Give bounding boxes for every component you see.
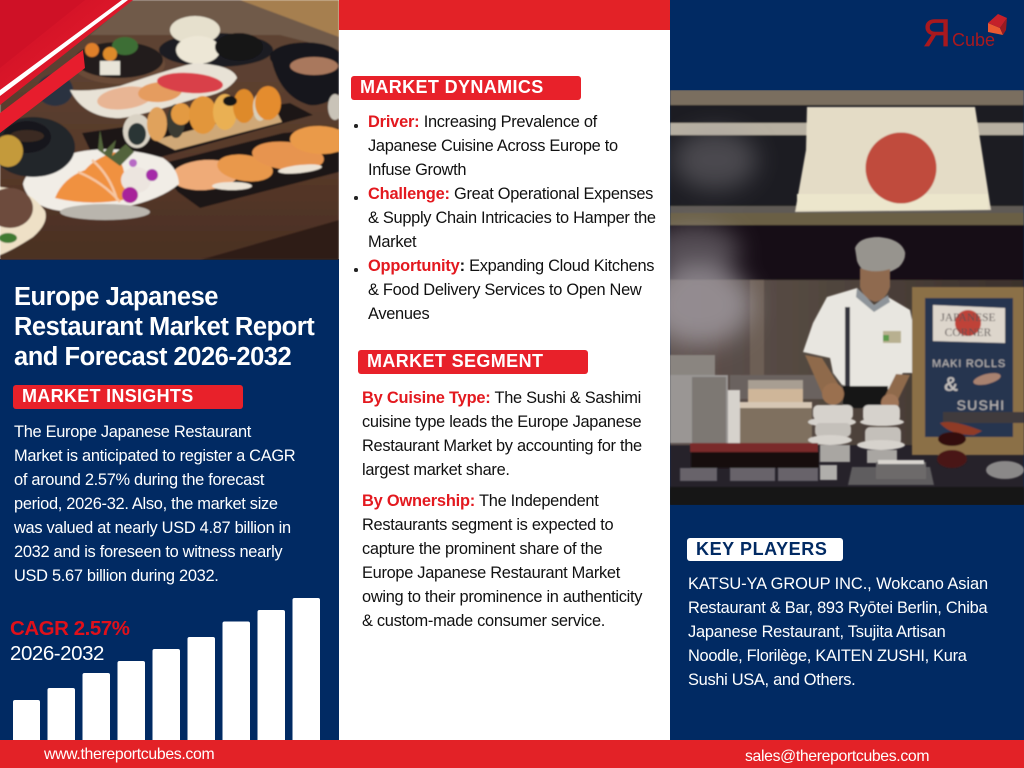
text: by ownership: Europe Japanese Restaurant Market: [362, 564, 620, 582]
flag: [795, 107, 991, 212]
text: by ownership: & custom-made consumer service.: [362, 612, 605, 630]
text: market insights: was valued at nearly USD 4.87 billion in: [14, 519, 291, 537]
heading: market segment: [358, 350, 588, 374]
text: by ownership: Restaurants segment is expected to: [362, 516, 613, 534]
footer: email: sales@thereportcubes.com: [745, 748, 929, 765]
left bottom plate: [0, 187, 46, 255]
heading: key players: KEY PLAYERS: [696, 539, 827, 559]
heading: market dynamics: [351, 76, 581, 100]
text: by cuisine type: [362, 389, 642, 479]
bar chart: CAGR growth: [13, 598, 320, 740]
text: market insights: USD 5.67 billion during 2032.: [14, 567, 219, 585]
title: Europe Japanese: [14, 283, 218, 311]
text: market insights: Market is anticipated to register a CAGR: [14, 447, 295, 465]
small dish left: [0, 117, 75, 177]
logo: RCube: Cube: [952, 30, 995, 50]
list: market dynamics: & Supply Chain Intricacies to Hamper the: [368, 209, 656, 227]
text: key players: Sushi USA, and Others.: [688, 671, 855, 689]
text: key players: [688, 575, 988, 689]
bowl right: [270, 42, 339, 105]
red lacquer trays: [690, 443, 818, 452]
text: market insights: [14, 423, 295, 585]
top plates: [159, 33, 273, 67]
panel: middle top red strip: [339, 0, 670, 30]
title: [14, 283, 314, 371]
text: by ownership: owing to their prominence in authenticity: [362, 588, 642, 606]
heading: market dynamics: MARKET DYNAMICS: [360, 77, 544, 97]
stand and table: [943, 412, 1024, 423]
text: market insights: 2032 and is foreseen to witness nearly: [14, 543, 282, 561]
text: key players: Noodle, Florilège, KAITEN ZUSHI, Kura: [688, 647, 967, 665]
pot and steam cooker: [670, 355, 715, 377]
text: by ownership: By Ownership: The Independent: [362, 492, 598, 510]
red corner ribbon: [0, 0, 133, 133]
photo: sushi platters with red corner ribbon: [0, 0, 339, 260]
panel: left navy column: [0, 259, 339, 740]
photo: chef in kitchen under Japanese flag: &: [944, 374, 958, 396]
list: market dynamics: Challenge: Great Operational Expenses: [368, 185, 653, 203]
list: market dynamics: Japanese Cuisine Across Europe to: [368, 137, 618, 155]
text: by cuisine type: By Cuisine Type: The Sushi & Sashimi: [362, 389, 641, 407]
heading: market segment: MARKET SEGMENT: [367, 351, 543, 371]
CAGR period: 2026-2032: [10, 642, 104, 665]
list: market dynamics: & Food Delivery Services to Open New: [368, 281, 641, 299]
chef: [855, 237, 905, 275]
containers: [748, 380, 803, 390]
nigiri plate: [70, 63, 237, 118]
sushi tray: [848, 467, 934, 485]
text: by ownership: capture the prominent share of the: [362, 540, 602, 558]
photo: chef in kitchen under Japanese flag: SUSHI: [957, 397, 1005, 413]
text: market insights: The Europe Japanese Restaurant: [14, 423, 251, 441]
heading: market insights: [13, 385, 243, 409]
title: Restaurant Market Report: [14, 313, 314, 341]
list: market dynamics: Opportunity: Expanding Cloud Kitchens: [368, 257, 654, 275]
sushi roll tray: [82, 103, 313, 160]
text: key players: Restaurant & Bar, 893 Ryōtei Berlin, Chiba: [688, 599, 987, 617]
heading: market insights: MARKET INSIGHTS: [22, 386, 194, 406]
bowls: [808, 405, 905, 463]
text: by ownership: [362, 492, 642, 630]
photo: chef in kitchen under Japanese flag: CORNER: [945, 327, 992, 339]
photo: chef in kitchen under Japanese flag: MAKI ROLLS: [932, 358, 1006, 370]
panel: right navy column: [670, 0, 1024, 740]
counter: [670, 487, 1024, 505]
sashimi plate: [23, 149, 179, 212]
list: market dynamics: Market: [368, 233, 416, 251]
text: by cuisine type: Restaurant Market by accounting for the: [362, 437, 642, 455]
CAGR value: CAGR 2.57%: [10, 617, 129, 640]
text: market insights: of around 2.57% during the forecast: [14, 471, 264, 489]
text: key players: KATSU-YA GROUP INC., Wokcano Asian: [688, 575, 988, 593]
text: by cuisine type: largest market share.: [362, 461, 510, 479]
title: and Forecast 2026-2032: [14, 343, 291, 371]
list: market dynamics: Driver: Increasing Prevalence of: [368, 113, 597, 131]
salmon tray: [156, 128, 339, 208]
text: key players: Japanese Restaurant, Tsujita Artisan: [688, 623, 945, 641]
footer: website: www.thereportcubes.com: [44, 746, 214, 763]
photo: chef in kitchen under Japanese flag: JAPANESE: [940, 312, 996, 324]
text: market insights: period, 2026-32. Also, the market size: [14, 495, 278, 513]
text: by cuisine type: cuisine type leads the Europe Japanese: [362, 413, 641, 431]
footer bar: [0, 740, 1024, 768]
sign: [912, 287, 1024, 455]
list: market dynamics: Avenues: [368, 305, 429, 323]
photo: chef in kitchen under Japanese flag: [670, 90, 1024, 505]
list: market dynamics: Infuse Growth: [368, 161, 466, 179]
list: market dynamics: [354, 113, 656, 323]
logo: RCube: [923, 13, 1007, 52]
steam: [648, 130, 757, 345]
